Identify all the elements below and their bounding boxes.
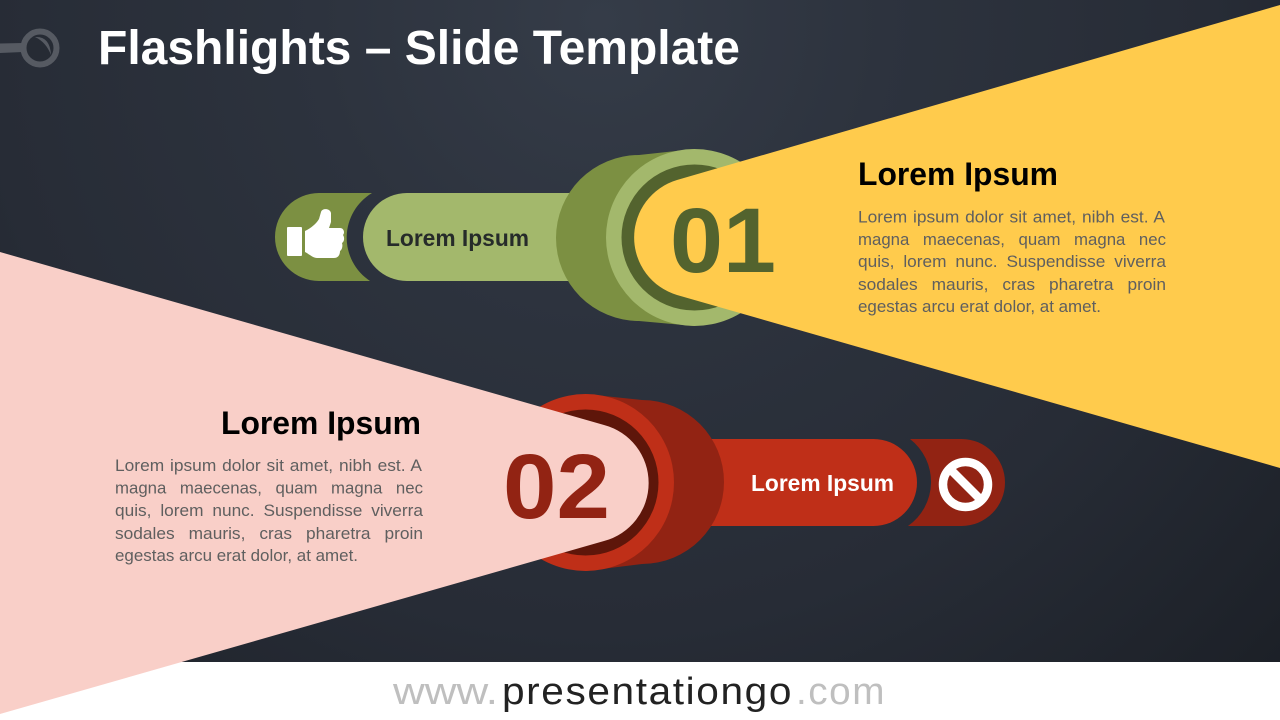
beam shape xyxy=(634,5,1280,468)
body text: Lorem ipsum dolor sit amet, nibh est. A xyxy=(115,456,423,475)
footer URL xyxy=(392,671,886,713)
flashlight lens ring xyxy=(512,410,658,556)
beam shape xyxy=(0,252,649,714)
body text: sodales mauris, cras pharetra proin xyxy=(858,275,1166,294)
number 01: 01 xyxy=(670,190,776,292)
icon: prohibition sign xyxy=(943,462,988,507)
body text: magna maecenas, quam magna nec xyxy=(858,230,1166,249)
body text: quis, lorem nunc. Suspendisse viverra xyxy=(858,252,1167,271)
heading: Lorem Ipsum xyxy=(858,156,1058,192)
footer URL: .com xyxy=(796,671,886,713)
end cap with thumbs-up xyxy=(275,193,372,281)
panel: pink light beam xyxy=(0,252,649,714)
body text: magna maecenas, quam magna nec xyxy=(115,478,423,498)
handle body xyxy=(680,439,917,526)
body text: sodales mauris, cras pharetra proin xyxy=(115,524,423,543)
icon: thumbs up xyxy=(287,209,344,258)
handle label: Lorem Ipsum xyxy=(386,225,529,251)
icon: small flashlight logo xyxy=(0,32,56,64)
handle body xyxy=(363,193,600,281)
body text: egestas arcu erat dolor, at amet. xyxy=(858,297,1101,316)
body text: egestas arcu erat dolor, at amet. xyxy=(115,546,358,565)
body text: Lorem ipsum dolor sit amet, nibh est. A xyxy=(858,208,1166,226)
flashlight 01 xyxy=(275,149,783,326)
flashlight head rim xyxy=(497,394,674,571)
title: Flashlights – Slide Template xyxy=(98,22,740,75)
panel: yellow light beam xyxy=(634,5,1280,468)
flashlight 02 xyxy=(497,394,1005,571)
footer band xyxy=(0,662,1280,720)
flashlight head rim xyxy=(606,149,783,326)
footer URL: www. xyxy=(392,671,498,713)
handle label: Lorem Ipsum xyxy=(751,470,894,496)
footer URL: presentationgo xyxy=(502,671,793,713)
number 02: 02 xyxy=(503,436,610,538)
flashlight head side xyxy=(586,394,724,571)
end cap with prohibition sign xyxy=(908,439,1005,526)
flashlight head side xyxy=(556,149,694,326)
body text: quis, lorem nunc. Suspendisse viverra xyxy=(115,501,424,520)
body text xyxy=(858,208,1167,316)
flashlight lens ring xyxy=(622,164,768,310)
body text xyxy=(115,456,424,565)
heading: Lorem Ipsum xyxy=(221,405,421,441)
